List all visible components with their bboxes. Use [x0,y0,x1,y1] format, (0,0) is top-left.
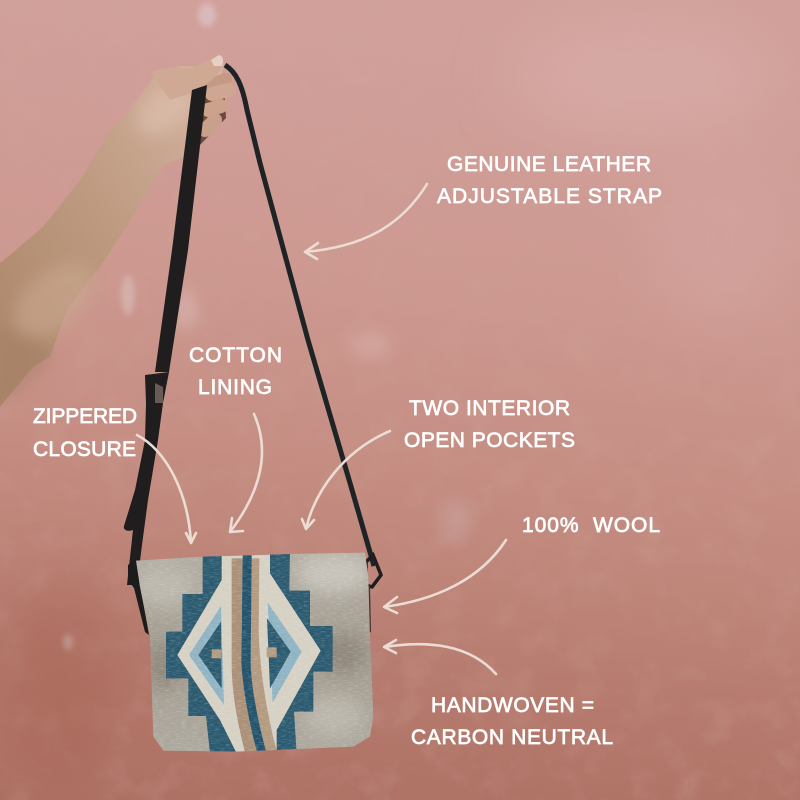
label: handwoven carbon neutral [411,694,613,749]
bag grey body [136,552,374,752]
label: zippered closure [33,405,137,461]
woven wool bag [136,552,374,752]
shadow between fingers [200,84,226,145]
thumb [150,56,223,100]
label: zippered closure: ZIPPERED [33,405,137,428]
left inner diamond [189,606,224,705]
left leather strap [124,85,207,585]
wool texture [136,552,373,752]
arm and hand [0,55,229,407]
arrow: to wool [384,540,506,613]
label: two interior open pockets: OPEN POCKETS [404,429,575,452]
label: handwoven carbon neutral: HANDWOVEN = [431,694,594,717]
arrow: to handwoven bag [384,640,496,674]
label: genuine leather adjustable strap: GENUINE LEATHER [447,153,651,176]
label: zippered closure: CLOSURE [33,438,136,461]
arrow: to strap [305,184,427,259]
buckle [155,383,163,403]
label: 100% wool: 100% WOOL [522,514,660,537]
arrow: to pockets [302,431,390,529]
bag teal stepped motif [166,550,333,753]
label: genuine leather adjustable strap: ADJUSTABLE STRAP [437,185,662,208]
label: handwoven carbon neutral: CARBON NEUTRAL [411,726,613,749]
centre stripes [232,558,257,753]
label: genuine leather adjustable strap [437,153,662,208]
bag cream diamond [177,553,321,753]
label: cotton lining [189,344,282,399]
bag clasps and side leather [128,555,381,635]
arrow: to zipper [137,435,196,543]
right thin strap [225,65,374,566]
arrow: to lining [230,414,262,532]
fingers [205,79,229,130]
label: cotton lining: COTTON [189,344,282,367]
label: two interior open pockets [404,397,575,452]
label: cotton lining: LINING [198,376,272,399]
label: two interior open pockets: TWO INTERIOR [409,397,570,420]
right inner diamond [268,603,302,703]
bag mottled light and dark areas [133,553,370,737]
